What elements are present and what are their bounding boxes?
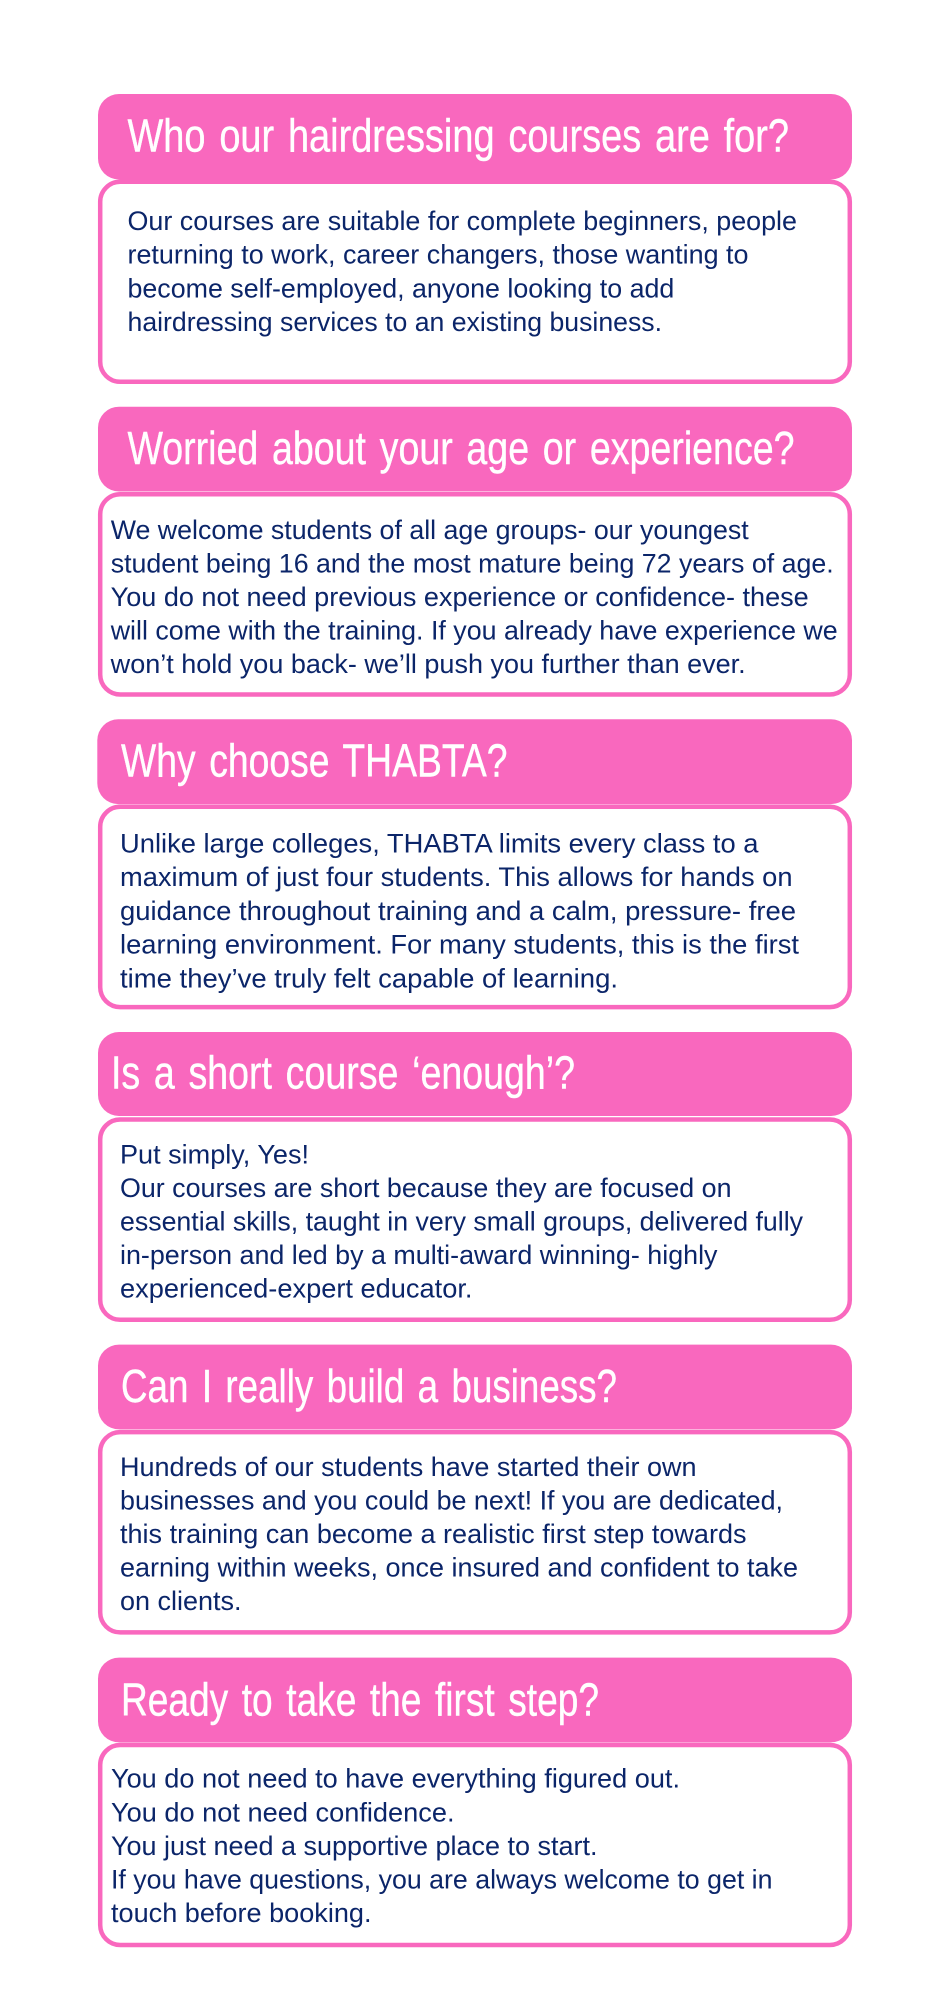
text box: why choose THABTA: Unlike large colleges, THABTA limits every class to a — [120, 828, 759, 858]
text box: is a short course enough: in-person and led by a multi-award winning- highly — [120, 1240, 718, 1270]
panel: ready to take the first step — [98, 1658, 852, 1945]
panel: why choose THABTA — [97, 719, 852, 1007]
text box: ready to take the first step: You do not need to have everything figured out. — [111, 1764, 680, 1794]
heading bar: worried about age or experience — [98, 407, 852, 492]
panel: is a short course enough — [98, 1032, 852, 1320]
text box: is a short course enough: Our courses are short because they are focused on — [120, 1173, 732, 1203]
heading bar: ready to take the first step: Ready to take the first step? — [121, 1673, 599, 1725]
heading bar: who our courses are for: Who our hairdressing courses are for? — [128, 110, 789, 162]
text box: can I really build a business: on clients. — [120, 1586, 242, 1616]
text box: who our courses are for: become self-employed, anyone looking to add — [128, 273, 674, 303]
text box: can I really build a business: earning within weeks, once insured and confident to take — [120, 1552, 798, 1582]
text box: who our courses are for: returning to work, career changers, those wanting to — [128, 240, 748, 270]
heading bar: can I really build a business — [98, 1345, 852, 1429]
text box: why choose THABTA: time they’ve truly felt capable of learning. — [120, 963, 618, 993]
heading bar: why choose THABTA — [97, 719, 852, 804]
panel: can I really build a business — [98, 1345, 852, 1632]
panel: worried about age or experience — [98, 407, 852, 694]
text box: ready to take the first step — [100, 1745, 850, 1945]
text box: ready to take the first step: touch before booking. — [111, 1898, 372, 1928]
text box: who our courses are for: Our courses are suitable for complete beginners, people — [128, 206, 797, 236]
text box: worried about age or experience: We welcome students of all age groups- our youngest — [111, 515, 749, 545]
text box: is a short course enough — [100, 1120, 850, 1320]
text box: who our courses are for — [100, 182, 850, 382]
text box: worried about age or experience: won’t hold you back- we’ll push you further than ever. — [110, 649, 746, 679]
text box: worried about age or experience — [100, 494, 850, 694]
text box: why choose THABTA: guidance throughout training and a calm, pressure- free — [120, 896, 796, 926]
heading bar: ready to take the first step — [98, 1658, 852, 1742]
text box: can I really build a business: Hundreds of our students have started their own — [120, 1452, 696, 1482]
text box: is a short course enough: experienced-expert educator. — [120, 1273, 472, 1303]
text box: worried about age or experience: will come with the training. If you already have experience we — [110, 616, 838, 646]
text box: why choose THABTA: learning environment. For many students, this is the first — [120, 930, 800, 960]
text box: who our courses are for: hairdressing services to an existing business. — [128, 307, 662, 337]
heading bar: worried about age or experience: Worried about your age or experience? — [128, 422, 794, 474]
text box: is a short course enough: essential skills, taught in very small groups, delivered fully — [120, 1206, 803, 1236]
heading bar: is a short course enough: Is a short course ‘enough’? — [111, 1047, 575, 1099]
text box: why choose THABTA: maximum of just four students. This allows for hands on — [120, 862, 792, 892]
text box: can I really build a business: this training can become a realistic first step towards — [120, 1519, 746, 1549]
heading bar: is a short course enough — [98, 1032, 852, 1116]
text box: ready to take the first step: You do not need confidence. — [111, 1797, 454, 1827]
heading bar: why choose THABTA: Why choose THABTA? — [121, 735, 508, 787]
text box: why choose THABTA — [100, 807, 850, 1007]
text box: worried about age or experience: student being 16 and the most mature being 72 years of age. — [111, 549, 834, 579]
heading bar: can I really build a business: Can I really build a business? — [121, 1360, 617, 1412]
text box: can I really build a business — [100, 1432, 850, 1632]
heading bar: who our courses are for — [98, 94, 852, 180]
text box: is a short course enough: Put simply, Yes! — [120, 1139, 309, 1169]
panel: who our courses are for — [98, 94, 852, 382]
text box: worried about age or experience: You do not need previous experience or confidence- these — [111, 582, 809, 612]
text box: ready to take the first step: You just need a supportive place to start. — [111, 1831, 598, 1861]
text box: can I really build a business: businesses and you could be next! If you are dedicated, — [120, 1485, 783, 1515]
text box: ready to take the first step: If you have questions, you are always welcome to get in — [111, 1864, 772, 1894]
